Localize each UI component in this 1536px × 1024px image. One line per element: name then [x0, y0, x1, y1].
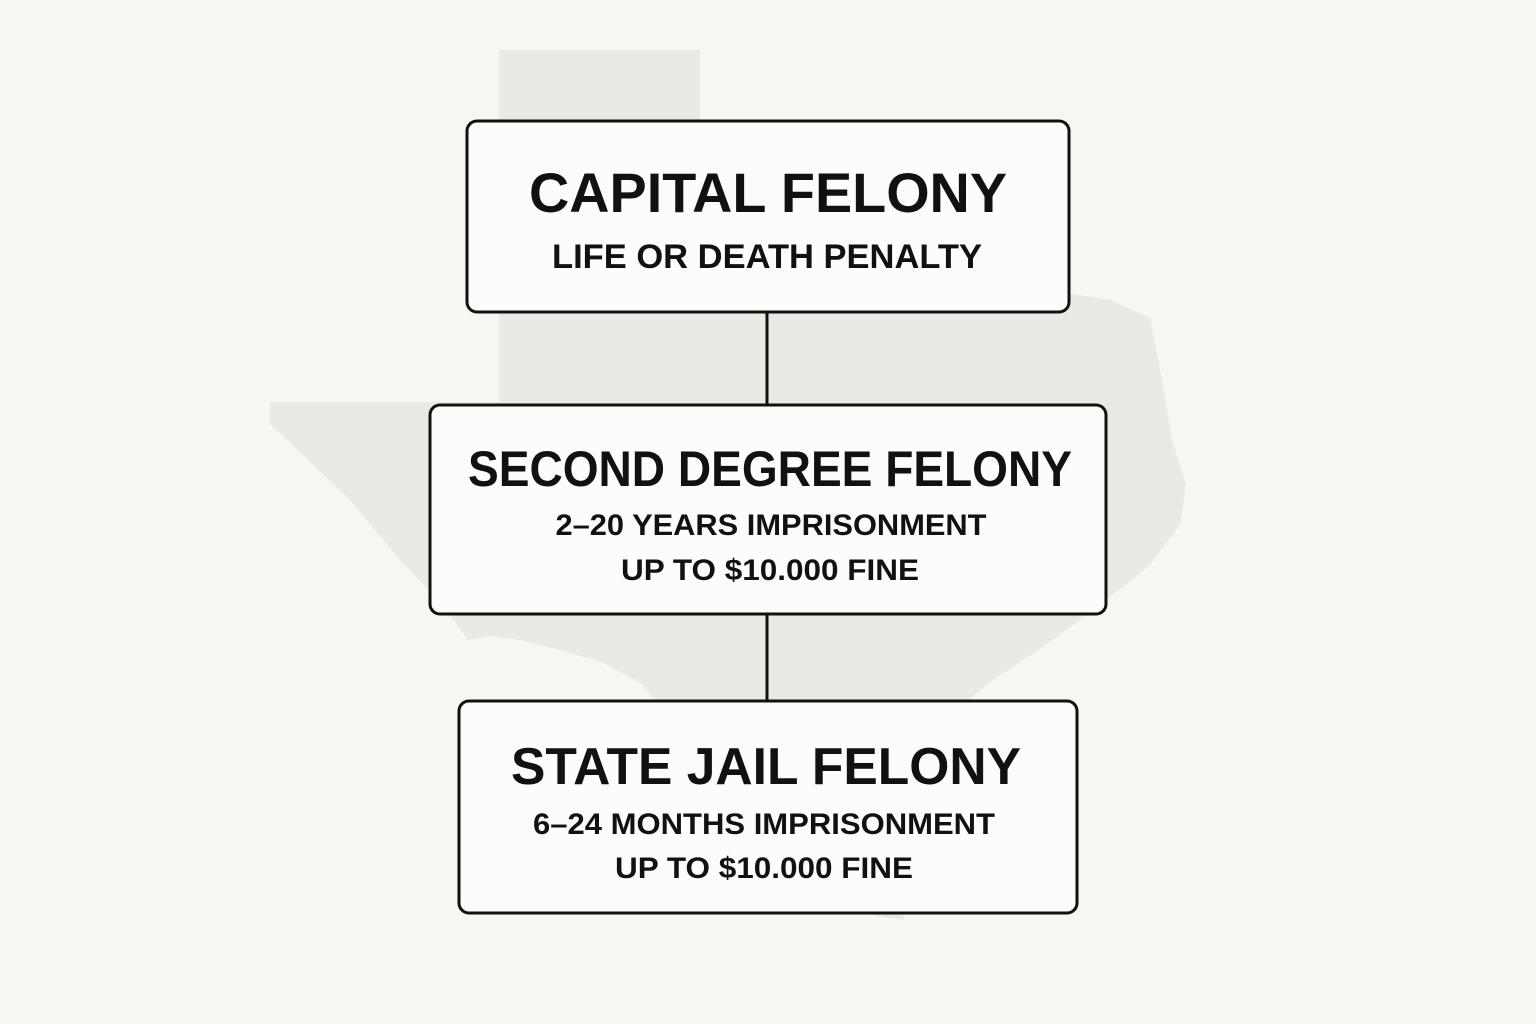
text: life or death penalty: LIFE OR DEATH PENALTY — [552, 238, 982, 276]
connector: capital to second degree — [766, 312, 768, 405]
panel: state jail felony — [459, 701, 1077, 913]
connector: second degree to state jail — [766, 614, 768, 701]
heading: second degree felony: SECOND DEGREE FELONY — [468, 441, 1072, 497]
text: second degree penalties — [556, 509, 986, 587]
panel: second degree felony — [430, 405, 1106, 614]
background map: Texas silhouette — [270, 50, 1186, 920]
heading: capital felony: CAPITAL FELONY — [529, 161, 1007, 224]
heading: state jail felony: STATE JAIL FELONY — [511, 738, 1021, 796]
panel: capital felony — [467, 121, 1069, 312]
text: state jail penalties: UP TO $10.000 FINE — [615, 852, 913, 885]
text: state jail penalties — [533, 808, 995, 885]
text: second degree penalties: 2–20 YEARS IMPRISONMENT — [556, 509, 986, 542]
text: state jail penalties: 6–24 MONTHS IMPRISONMENT — [533, 808, 995, 841]
text: second degree penalties: UP TO $10.000 FINE — [621, 554, 919, 587]
